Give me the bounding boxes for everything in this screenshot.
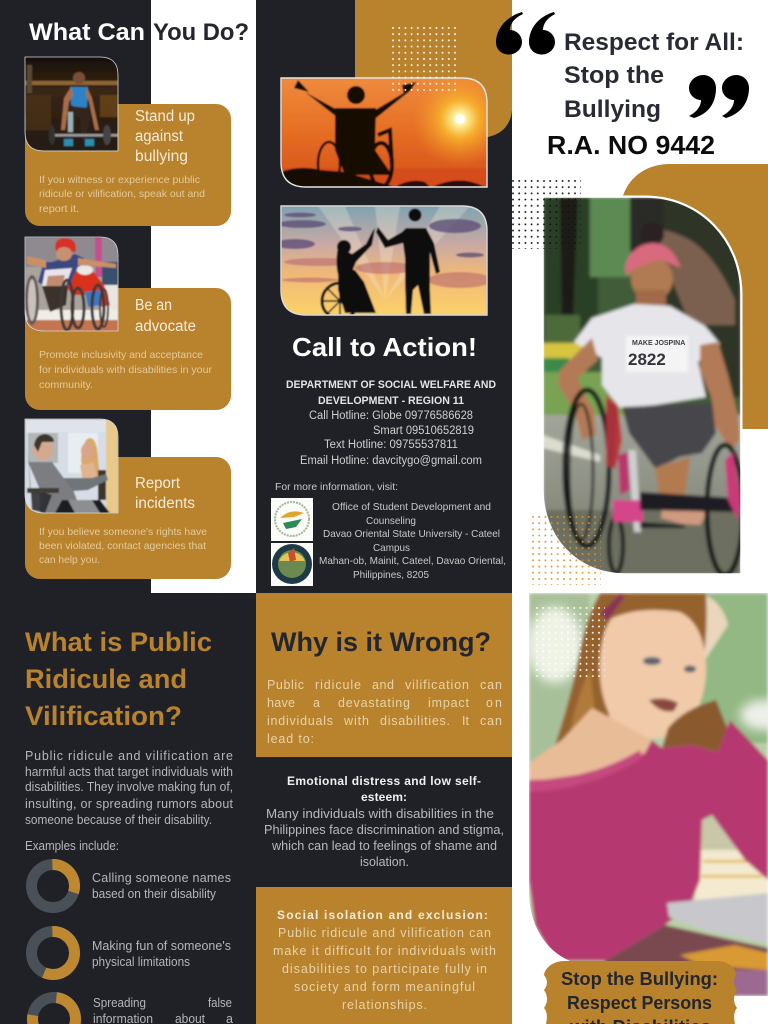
heading: stand up against bullying: bullying — [135, 148, 188, 165]
text: definition: disabilities. They involve making fun of, — [25, 780, 233, 794]
text: impact introduction: devastating — [338, 696, 410, 710]
text: social isolation description: Public ridicule and vilification can — [278, 926, 491, 940]
text: advocate description: for individuals with disabilities in your — [39, 364, 212, 376]
photo: athlete lifting barbell — [25, 57, 118, 151]
text: stand up description: ridicule or vilification, speak out and — [39, 188, 205, 200]
text: impact introduction: ridicule — [315, 678, 361, 692]
text: stand up description — [39, 174, 205, 215]
text: example two — [92, 939, 231, 969]
heading: what is public ridicule and vilification: What is Public — [25, 627, 212, 657]
text: impact introduction — [267, 678, 502, 746]
panel: white right column — [512, 0, 768, 1024]
heading: respect for all: Bullying — [564, 96, 661, 123]
heading: call to action: Call to Action! — [292, 332, 477, 362]
text: advocate description: community. — [39, 379, 93, 391]
text: emotional distress description: isolation. — [360, 855, 409, 869]
heading: stand up against bullying — [135, 108, 195, 165]
text: impact introduction: lead to: — [267, 732, 314, 746]
text: hotline details — [286, 379, 496, 467]
text: example two: physical limitations — [92, 955, 190, 969]
panel: what is public ridicule — [0, 593, 256, 1024]
panel: what can you do — [25, 19, 249, 579]
text: impact introduction: Public — [267, 678, 304, 692]
panel: emotional distress — [256, 757, 512, 887]
text: definition: Public ridicule and vilification are — [25, 749, 233, 763]
panel: white strip behind action cards — [151, 0, 256, 593]
heading: emotional distress: Emotional distress and low self- — [287, 774, 481, 788]
panel: call to action column — [256, 0, 512, 593]
photo: woman in wheelchair — [543, 197, 743, 575]
text: office address: Campus — [373, 542, 410, 554]
heading: be an advocate: Be an — [135, 297, 172, 314]
heading: stand up against bullying: Stand up — [135, 108, 195, 125]
dots: orange dot grid — [532, 516, 601, 585]
heading: respect for all: Respect for All: — [564, 29, 744, 56]
text: impact introduction: impact — [428, 696, 470, 710]
text: example one: Calling someone names — [92, 871, 231, 885]
heading: emotional distress: esteem: — [361, 790, 407, 804]
text: impact introduction: vilification — [405, 678, 469, 692]
text: report description: If you believe someone's rights have — [39, 526, 207, 538]
chart: donut two — [32, 932, 74, 974]
text: example three: Spreading — [93, 996, 146, 1010]
heading: what can you do — [29, 19, 249, 46]
text: examples label: Examples include: — [25, 839, 119, 853]
text: impact introduction: on — [486, 696, 502, 710]
text: example three: false — [208, 996, 232, 1010]
text: office address: Davao Oriental State University - Cateel — [323, 528, 500, 540]
text: emotional distress description — [264, 807, 504, 869]
text: emotional distress description: Philippines face discrimination and stigma, — [264, 823, 504, 837]
text: impact introduction: have — [267, 696, 295, 710]
dots: white dot grid — [392, 27, 460, 95]
text: office address: Office of Student Development and — [332, 501, 491, 513]
dots: black dot grid — [512, 180, 581, 249]
callout: stop the bullying — [544, 961, 737, 1024]
text: impact introduction: a — [313, 696, 320, 710]
heading: law number: R.A. NO 9442 — [547, 130, 715, 160]
decorative gold shape — [355, 0, 512, 137]
text: impact introduction: with — [343, 714, 369, 728]
heading: report incidents: Report — [135, 475, 181, 492]
text: office address: Counseling — [366, 515, 416, 527]
icon: closing quotation mark — [689, 75, 749, 118]
chart: donut one — [32, 864, 74, 908]
photo outline — [25, 57, 118, 151]
photo: wheelchair user at sunset — [280, 77, 488, 188]
text: emotional distress description: Many individuals with disabilities in the — [266, 807, 494, 821]
text: definition: harmful acts that target individuals with — [25, 765, 233, 779]
text: example two: Making fun of someone's — [92, 939, 231, 953]
text: race bib number: MAKE JOSPINA — [632, 340, 685, 347]
text: hotline details: DEPARTMENT OF SOCIAL WELFARE AND — [286, 379, 496, 391]
text: report description: can help you. — [39, 554, 100, 566]
panel: why is it wrong — [256, 593, 512, 757]
text: impact introduction: can — [480, 678, 502, 692]
heading: why is it wrong: Why is it Wrong? — [271, 627, 491, 657]
heading: what can you do: What Can — [29, 19, 145, 46]
panel: cover title — [496, 12, 749, 160]
text: social isolation description: society and form meaningful — [294, 980, 475, 994]
text: race bib number: 2822 — [628, 350, 666, 369]
heading: what is public ridicule and vilification: Ridicule and — [25, 664, 187, 694]
heading: report incidents: incidents — [135, 495, 195, 512]
heading: what is public ridicule and vilification — [25, 627, 212, 731]
text: stand up description: If you witness or experience public — [39, 174, 200, 186]
text: office address: Mahan-ob, Mainit, Cateel, Davao Oriental, — [319, 555, 506, 567]
photo: wheelchair racers — [25, 237, 118, 331]
heading: be an advocate — [135, 297, 196, 335]
card: report incidents — [25, 419, 231, 579]
text: office address — [319, 501, 506, 581]
text: impact introduction: can — [480, 714, 502, 728]
heading: what can you do: You Do? — [153, 19, 249, 46]
heading: emotional distress — [287, 774, 481, 804]
callout: stop the bullying: Stop the Bullying: — [561, 969, 718, 989]
photo: smiling boy and carer — [25, 419, 118, 513]
text: example three — [93, 996, 233, 1024]
card: stand up against bullying — [25, 57, 231, 226]
text: impact introduction: individuals — [267, 714, 333, 728]
photo outline — [25, 419, 118, 513]
text: impact introduction: It — [462, 714, 470, 728]
photo outline — [25, 237, 118, 331]
text: race bib number — [628, 340, 686, 365]
text: impact introduction: and — [372, 678, 394, 692]
logo: university seal — [271, 543, 313, 586]
panel: girl photo with slogan — [527, 593, 768, 1024]
text: hotline details: Email Hotline: davcitygo@gmail.com — [300, 455, 482, 467]
icon: opening quotation mark — [496, 12, 555, 54]
text: more information label: For more information, visit: — [275, 481, 398, 493]
text: example one — [92, 871, 231, 901]
photo: smiling girl at laptop — [527, 593, 768, 996]
text: social isolation description — [273, 926, 496, 1012]
text: social isolation description: relationships. — [342, 998, 427, 1012]
heading: respect for all: Stop the — [564, 62, 664, 89]
chart: donut three — [30, 995, 78, 1024]
text: stand up description: report it. — [39, 203, 79, 215]
text: hotline details: Text Hotline: 09755537811 — [324, 439, 458, 451]
text: definition — [25, 749, 234, 827]
heading: what is public ridicule and vilification: Vilification? — [25, 701, 182, 731]
panel: cover photo group — [512, 164, 768, 585]
text: impact introduction: disabilities. — [380, 714, 450, 728]
text: hotline details: Smart 09510652819 — [373, 425, 474, 437]
text: advocate description: Promote inclusivity and acceptance — [39, 349, 203, 361]
text: report description: been violated, contact agencies that — [39, 540, 206, 552]
dots: white dot grid on photo — [536, 607, 605, 677]
panel: social isolation — [256, 887, 512, 1024]
heading: be an advocate: advocate — [135, 318, 196, 335]
text: social isolation description: disabilities to participate fully in — [282, 962, 487, 976]
photo: high five at sunset — [275, 206, 492, 319]
heading: report incidents — [135, 475, 195, 512]
text: emotional distress description: which can lead to feelings of shame and — [271, 839, 497, 853]
text: definition: someone because of their disability. — [25, 813, 212, 827]
logo: student development office — [271, 498, 313, 541]
text: hotline details: DEVELOPMENT - REGION 11 — [318, 395, 464, 407]
text: definition: insulting, or spreading rumors about — [25, 797, 234, 811]
text: advocate description — [39, 349, 212, 391]
text: example one: based on their disability — [92, 887, 217, 901]
text: hotline details: Call Hotline: Globe 09776586628 — [309, 410, 473, 422]
heading: respect for all — [564, 29, 744, 123]
text: social isolation description: make it difficult for individuals with — [273, 944, 496, 958]
decorative gold shape — [620, 164, 768, 429]
callout: stop the bullying: Respect Persons — [567, 993, 712, 1013]
text: office address: Philippines, 8205 — [353, 569, 429, 581]
card: be an advocate — [25, 237, 231, 410]
heading: stand up against bullying: against — [135, 128, 184, 145]
heading: social isolation: Social isolation and exclusion: — [277, 908, 488, 922]
text: report description — [39, 526, 207, 566]
